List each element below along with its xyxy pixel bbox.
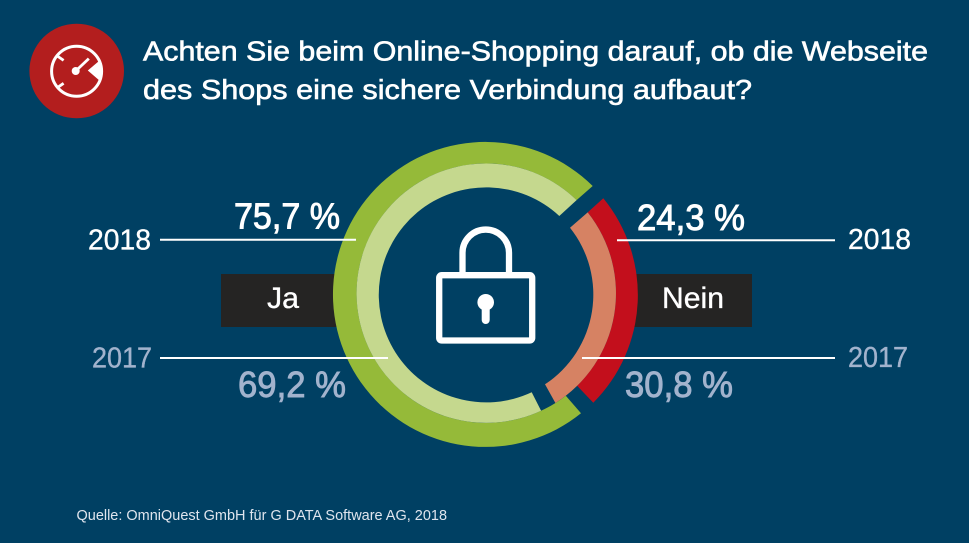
source note: Quelle: OmniQuest GmbH für G DATA Software AG, 2018: [76, 507, 447, 524]
leader line: Nein 2018: [617, 239, 835, 241]
year label: right 2018: 2018: [848, 224, 911, 256]
label box: Nein: Nein: [662, 282, 724, 315]
value: Ja 2017: 69,2 %: [238, 364, 346, 405]
year label: left 2017: 2017: [92, 343, 152, 375]
title: des Shops eine sichere Verbindung aufbaut?: [143, 74, 752, 105]
year label: right 2017: 2017: [848, 342, 908, 374]
ring segment: Ja 2017: [357, 163, 577, 423]
label box: Nein: [632, 274, 752, 327]
value: Nein 2017: 30,8 %: [625, 364, 733, 405]
label box: Ja: [221, 274, 341, 327]
ring segment: Nein 2017: [545, 212, 616, 403]
leader line: Ja 2018: [160, 239, 356, 241]
ring segment: Nein 2018: [577, 198, 638, 403]
value: Ja 2018: 75,7 %: [234, 196, 340, 236]
value: Nein 2018: 24,3 %: [637, 197, 745, 238]
title: Achten Sie beim Online-Shopping darauf, ob die Webseite: [143, 36, 928, 66]
label box: Ja: Ja: [267, 282, 299, 315]
icon: gauge badge: [29, 24, 124, 118]
leader line: Ja 2017: [160, 357, 388, 359]
title: [143, 36, 928, 105]
donut chart: [333, 142, 638, 447]
icon: padlock: [439, 230, 532, 340]
year label: left 2018: 2018: [88, 224, 151, 256]
leader line: Nein 2017: [582, 357, 835, 359]
ring segment: Ja 2018: [333, 142, 593, 447]
